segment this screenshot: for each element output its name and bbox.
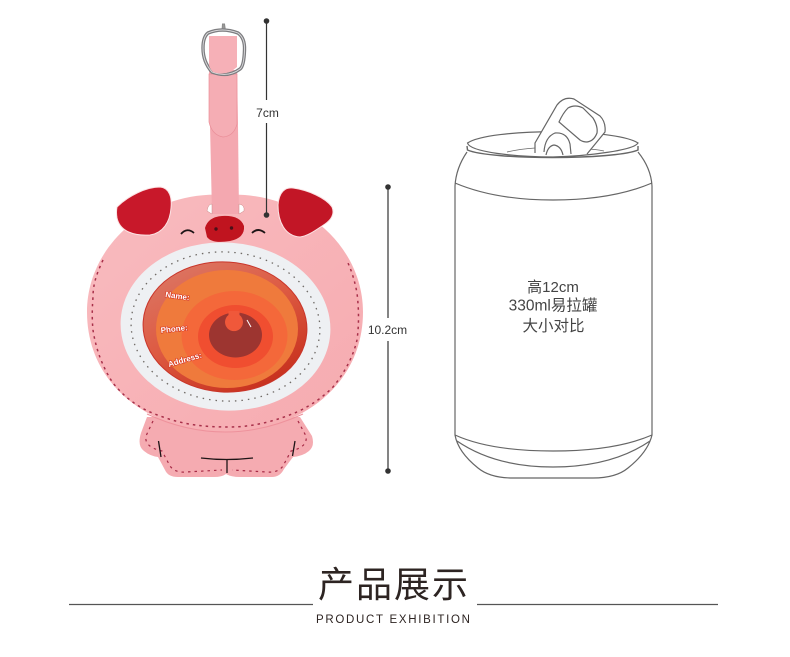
leg and foot marks xyxy=(158,441,295,473)
buckle xyxy=(203,24,245,74)
can pull tab xyxy=(535,98,605,155)
pupil xyxy=(209,312,262,358)
window xyxy=(140,258,310,396)
dimension: tag 10.2cm xyxy=(368,184,407,474)
text: 10.2cm: 10.2cm xyxy=(368,323,407,337)
subtitle: PRODUCT EXHIBITION xyxy=(316,614,472,626)
window rim xyxy=(139,256,311,398)
strap slot xyxy=(207,204,244,214)
white ring xyxy=(115,235,336,418)
label: address: Address: xyxy=(167,351,203,369)
section heading xyxy=(69,564,718,626)
pig head xyxy=(87,195,363,432)
can body xyxy=(455,152,652,478)
dimension: strap 7cm xyxy=(256,18,279,218)
can caption xyxy=(509,279,597,335)
title: 产品展示 xyxy=(318,564,470,605)
head stitching xyxy=(92,260,358,427)
left ear xyxy=(116,187,171,235)
can caption: 高12cm xyxy=(527,279,579,296)
right ear xyxy=(278,188,333,237)
pig eyes xyxy=(181,230,265,234)
pig nose xyxy=(205,216,244,242)
can caption: 大小对比 xyxy=(522,317,585,335)
can shoulder line xyxy=(455,183,652,200)
strap flap xyxy=(209,74,237,137)
concentric rings xyxy=(156,270,298,388)
can lid xyxy=(468,132,638,157)
ring stitching xyxy=(126,246,325,407)
soda can outline xyxy=(455,98,652,478)
leg stitching xyxy=(146,421,306,472)
pig legs xyxy=(140,417,313,477)
label: name: Name: xyxy=(165,290,190,302)
head lower edge xyxy=(147,414,303,432)
text: 7cm: 7cm xyxy=(256,106,279,120)
label: phone: Phone: xyxy=(160,323,188,335)
can bottom lines xyxy=(455,435,652,451)
window base xyxy=(140,258,310,396)
luggage tag: pig xyxy=(87,24,363,477)
can caption: 330ml易拉罐 xyxy=(509,296,597,314)
pupil notch xyxy=(225,311,243,331)
strap xyxy=(209,70,239,214)
